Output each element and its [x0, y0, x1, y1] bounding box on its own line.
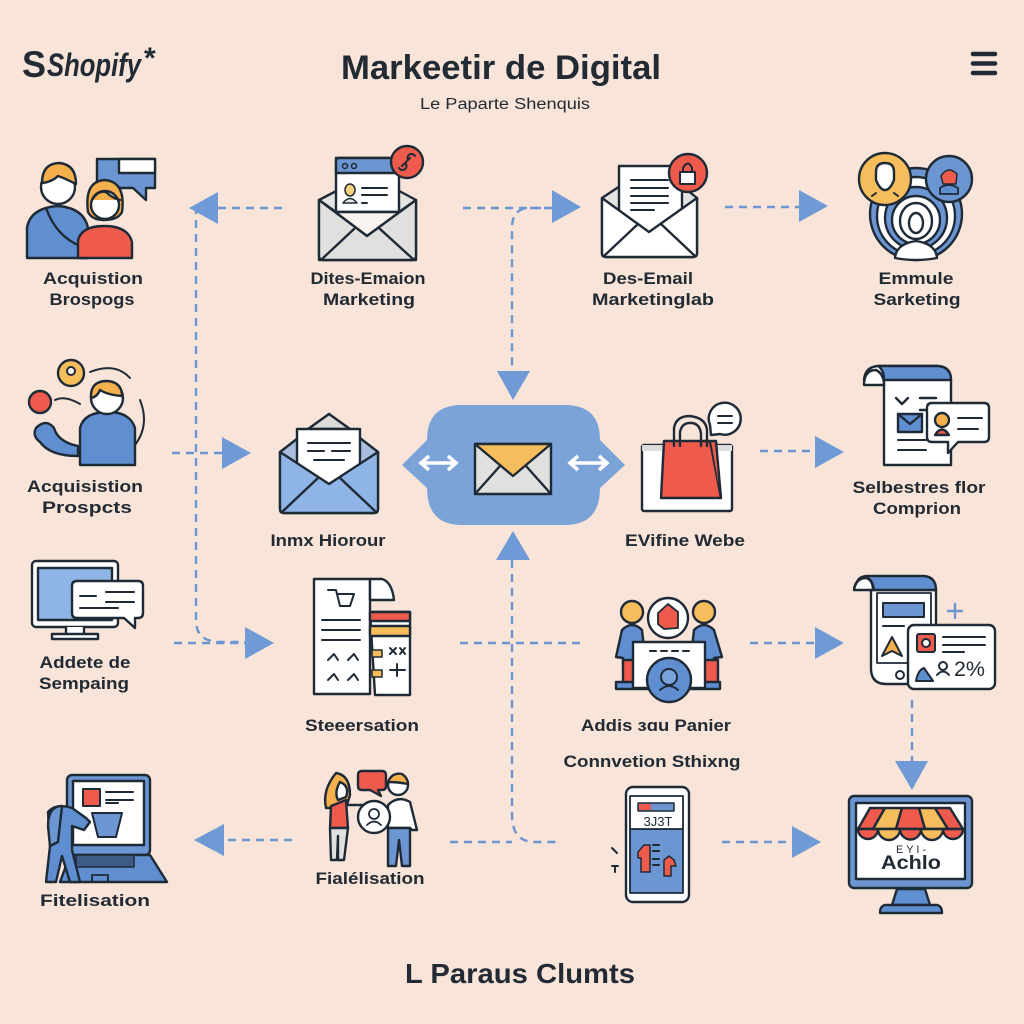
- label: Fitelisation: [40, 891, 150, 910]
- subtitle: Le Paparte Shenquis: [420, 96, 590, 113]
- label: Sarketing: [874, 290, 960, 309]
- logo: Shopify: S: [22, 44, 46, 85]
- connector lines: [172, 207, 912, 842]
- label: Steeersation: [305, 716, 419, 735]
- label: Addis ɜɑu Panier: [581, 716, 731, 735]
- icon: store front on monitor: [849, 796, 972, 913]
- label: Connvetion Sthixng: [564, 752, 740, 771]
- text: store sign: [881, 844, 941, 874]
- icon: computer monitor with chat: [32, 561, 143, 639]
- label: Des-Email: [603, 269, 693, 288]
- label: Sempaing: [39, 674, 129, 693]
- icon: mobile phone with stats card: [854, 576, 995, 689]
- logo: Shopify: Shopify: [47, 47, 143, 83]
- arrowheads: [189, 190, 928, 858]
- label: Comprion: [873, 499, 961, 518]
- icon: document with cart and calculator: [314, 579, 410, 695]
- icon: target with avatars: [859, 153, 972, 260]
- icon: two people with chat bubbles: [27, 159, 155, 258]
- panel: central hub: [402, 405, 625, 525]
- label: Fialélisation: [316, 869, 424, 888]
- label: Brospogs: [50, 290, 134, 309]
- text: phone screen code: 3J3T: [644, 814, 673, 829]
- icon: email with browser window: [319, 146, 423, 260]
- label: Acquisistion: [27, 477, 143, 496]
- label: Inmx Hiorour: [270, 531, 386, 550]
- text: percentage: 2%: [954, 658, 985, 681]
- logo: Shopify: [22, 42, 156, 85]
- icon: inbox envelope: [280, 414, 378, 513]
- icon: person at laptop with cart: [46, 775, 167, 882]
- icon: two people at counter: [616, 598, 722, 702]
- label: Emmule: [878, 269, 954, 288]
- label: Dites-Emaion: [310, 269, 426, 288]
- label: Prospcts: [42, 498, 132, 517]
- icon: email with lock: [602, 154, 707, 257]
- title: Markeetir de Digital: [341, 49, 661, 87]
- icon: menu: [973, 54, 995, 73]
- icon: person with orbiting icons: [29, 360, 144, 465]
- label: Marketing: [323, 290, 415, 309]
- icon: shopping bag with speech bubble: [642, 403, 741, 511]
- label: EVifine Webe: [625, 531, 745, 550]
- text: store sign: EYI-: [896, 844, 926, 856]
- icon: document with chat cards: [864, 366, 989, 465]
- icon: two people talking: [325, 771, 417, 866]
- label: Addete de: [40, 653, 130, 672]
- text: store sign: Achlo: [881, 853, 941, 874]
- label: Marketinglab: [592, 290, 714, 309]
- logo: Shopify: *: [144, 42, 156, 75]
- footer heading: L Paraus Clumts: [405, 958, 635, 989]
- label: Acquistion: [43, 269, 143, 288]
- icon: smartphone: [612, 787, 689, 902]
- label: Selbestres flor: [852, 478, 986, 497]
